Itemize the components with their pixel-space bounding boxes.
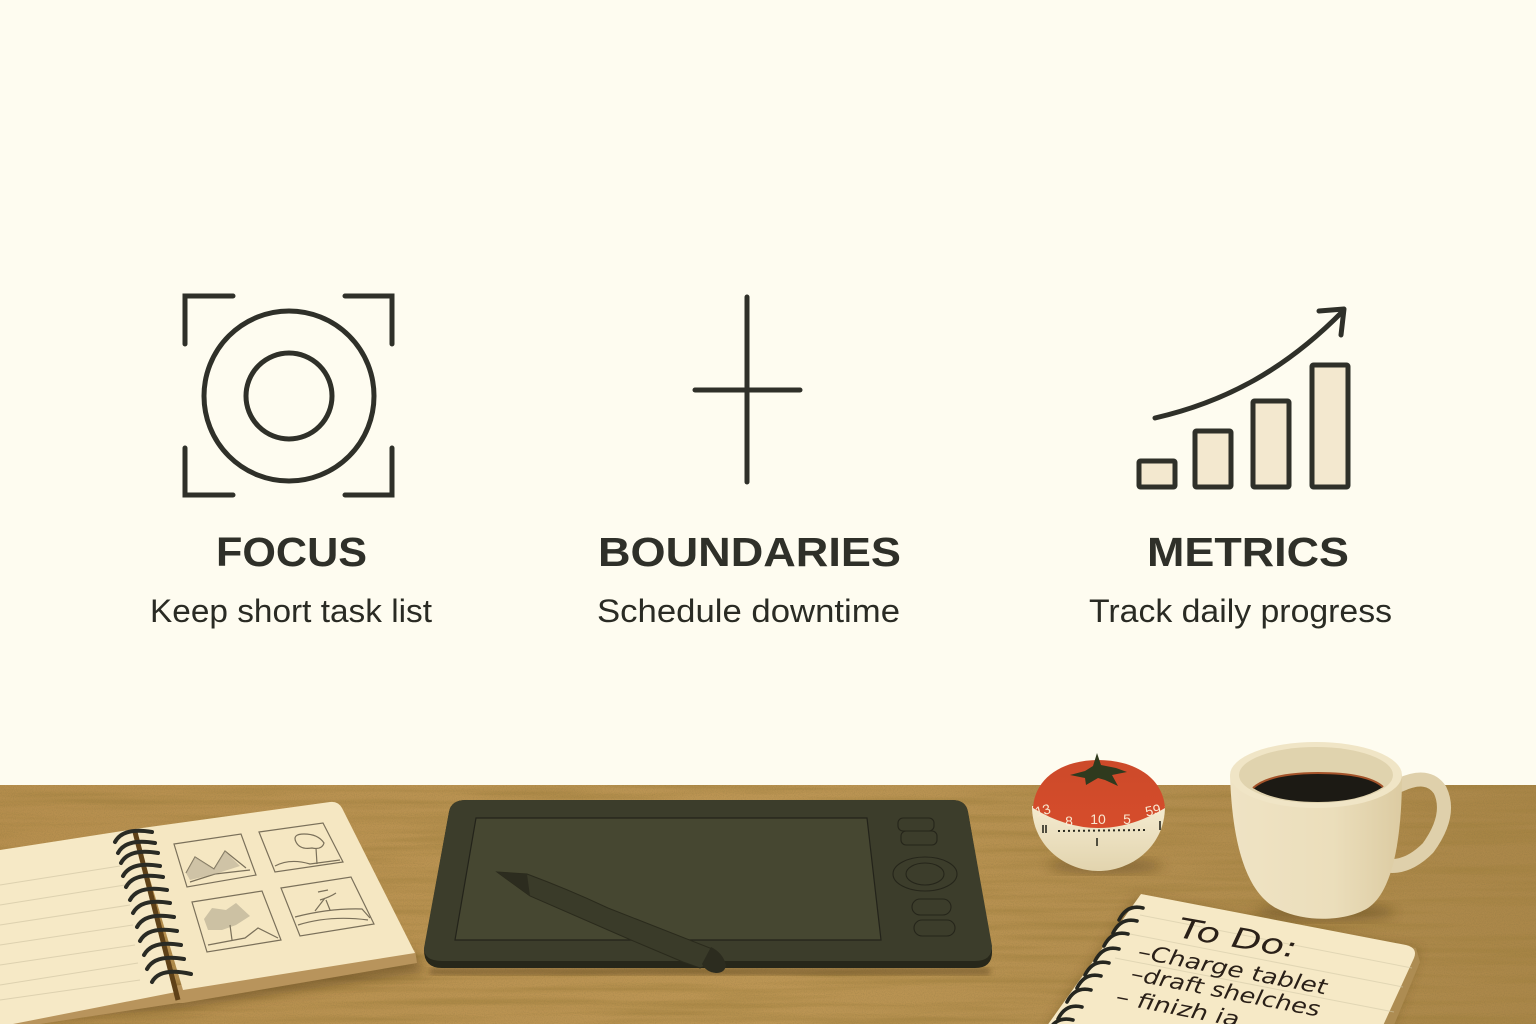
coffee surface — [1253, 773, 1383, 802]
tablet active area — [455, 818, 881, 940]
icon: focus target — [185, 296, 392, 495]
heading: focus: FOCUS — [216, 529, 367, 575]
notepad edge — [1137, 895, 1420, 1024]
spiral binding — [115, 831, 191, 982]
thumbnail: tree on hill — [259, 823, 343, 872]
to-do text — [1114, 911, 1330, 1024]
timer leaves — [1070, 753, 1127, 786]
timer base — [1032, 806, 1165, 871]
heading: metrics: METRICS — [1147, 529, 1349, 575]
text: boundaries description: Schedule downtime — [597, 593, 900, 629]
stylus pen — [497, 872, 726, 973]
to-do notepad — [1044, 894, 1420, 1024]
drawing tablet — [424, 800, 992, 975]
timer numbers: 10 — [1090, 811, 1106, 827]
timer numbers: 13 — [1033, 800, 1053, 820]
tomato timer — [1032, 753, 1165, 874]
mug rim — [1230, 742, 1402, 808]
coffee mug — [1230, 742, 1444, 922]
desk surface — [0, 785, 1536, 1024]
sketchbook left page — [0, 829, 176, 1024]
thumbnail: figure on shore — [281, 877, 374, 936]
text: metrics description: Track daily progress — [1089, 593, 1392, 629]
mug handle — [1392, 780, 1444, 866]
thumbnail: large tree — [192, 891, 281, 952]
timer dome — [1033, 760, 1165, 828]
sketch thumbnails — [174, 823, 374, 952]
column: boundaries — [597, 297, 901, 629]
to-do text: –Charge tablet — [1136, 939, 1330, 1000]
tablet buttons — [893, 818, 957, 936]
notepad spiral — [1049, 907, 1143, 1024]
icon: plus cross — [695, 297, 800, 482]
wall background — [0, 0, 1536, 786]
thumbnail: mountains — [174, 834, 256, 887]
timer numbers: 8 — [1065, 813, 1073, 829]
column: metrics — [1089, 309, 1392, 629]
heading: boundaries: BOUNDARIES — [598, 529, 901, 575]
sketchbook page edges — [0, 950, 417, 1024]
to-do text: To Do: — [1176, 911, 1300, 965]
notepad page — [1044, 894, 1415, 1024]
text: focus description: Keep short task list — [150, 593, 432, 629]
icon: rising bar chart with arrow — [1139, 309, 1348, 487]
column: focus — [150, 296, 432, 629]
timer numbers: 59 — [1144, 801, 1162, 820]
to-do text: –draft shelches — [1129, 961, 1322, 1022]
timer numbers — [1033, 800, 1162, 829]
timer numbers: 5 — [1123, 811, 1131, 827]
sketchbook right page — [135, 802, 415, 990]
timer ticks — [1043, 821, 1160, 846]
mug body — [1230, 775, 1402, 919]
tablet body — [424, 800, 992, 968]
sketchbook — [0, 802, 425, 1024]
